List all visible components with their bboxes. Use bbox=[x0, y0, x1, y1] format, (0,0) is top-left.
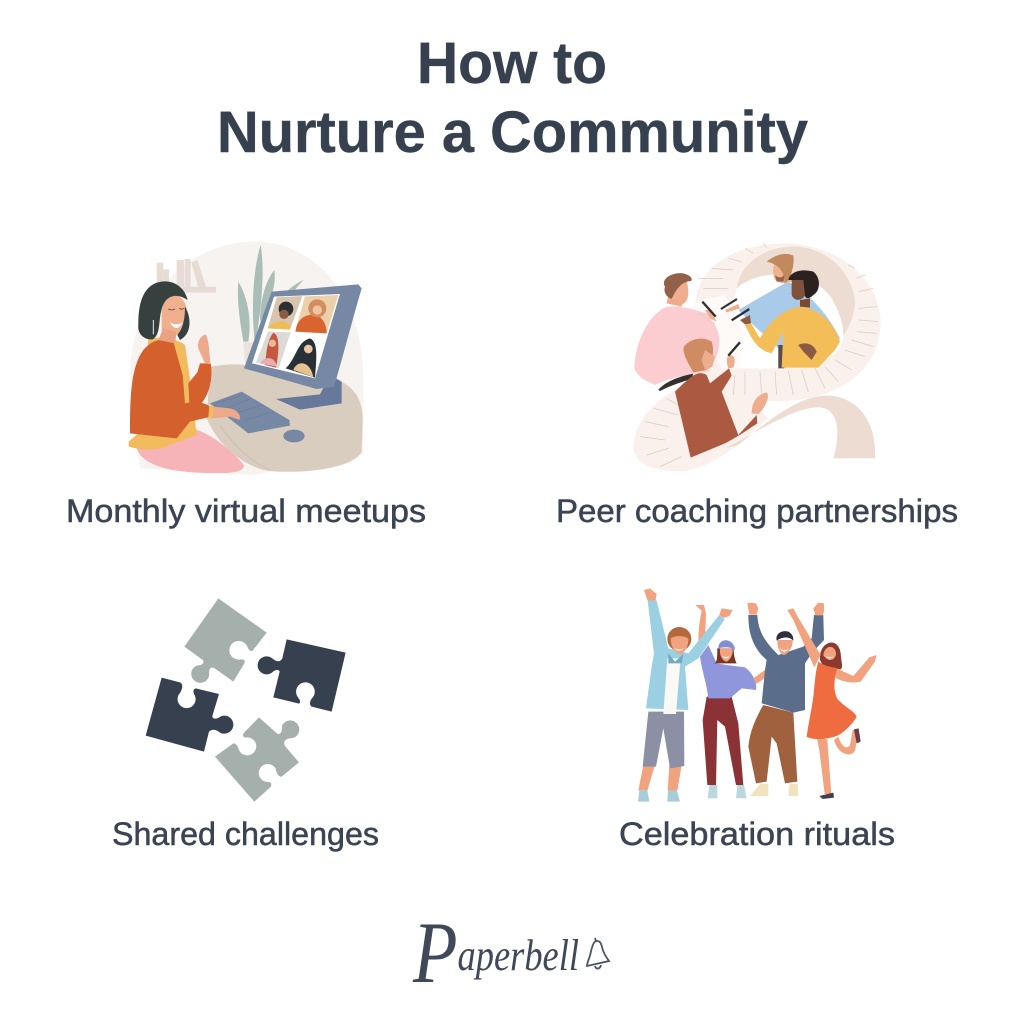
label: shared challenges: Shared challenges bbox=[112, 816, 379, 852]
title: How to bbox=[417, 31, 607, 96]
label: monthly virtual meetups: Monthly virtual meetups bbox=[66, 493, 426, 529]
puzzle piece: top grey bbox=[184, 598, 267, 683]
logo: Paperbell: aperbell bbox=[458, 931, 579, 980]
puzzle piece: bottom grey bbox=[215, 717, 299, 802]
panel: monthly virtual meetups illustration bbox=[129, 242, 363, 475]
puzzle piece: left dark bbox=[146, 678, 233, 752]
label: celebration rituals: Celebration rituals bbox=[619, 816, 895, 852]
icon: bell bbox=[587, 938, 609, 969]
title bbox=[217, 31, 808, 165]
title: Nurture a Community bbox=[217, 100, 808, 165]
person 2 bbox=[700, 640, 786, 798]
person 1 bbox=[638, 588, 733, 802]
panel: shared challenges puzzle pieces bbox=[146, 598, 346, 802]
puzzle piece: right dark bbox=[258, 639, 346, 712]
logo: Paperbell: P bbox=[412, 905, 458, 1002]
label: peer coaching partnerships: Peer coaching partnerships bbox=[556, 493, 958, 529]
logo: Paperbell bbox=[412, 905, 609, 1002]
person 3 bbox=[747, 603, 824, 796]
panel: peer coaching partnerships illustration bbox=[633, 243, 881, 471]
person 4 bbox=[787, 608, 877, 799]
panel: celebration rituals illustration bbox=[638, 588, 877, 802]
